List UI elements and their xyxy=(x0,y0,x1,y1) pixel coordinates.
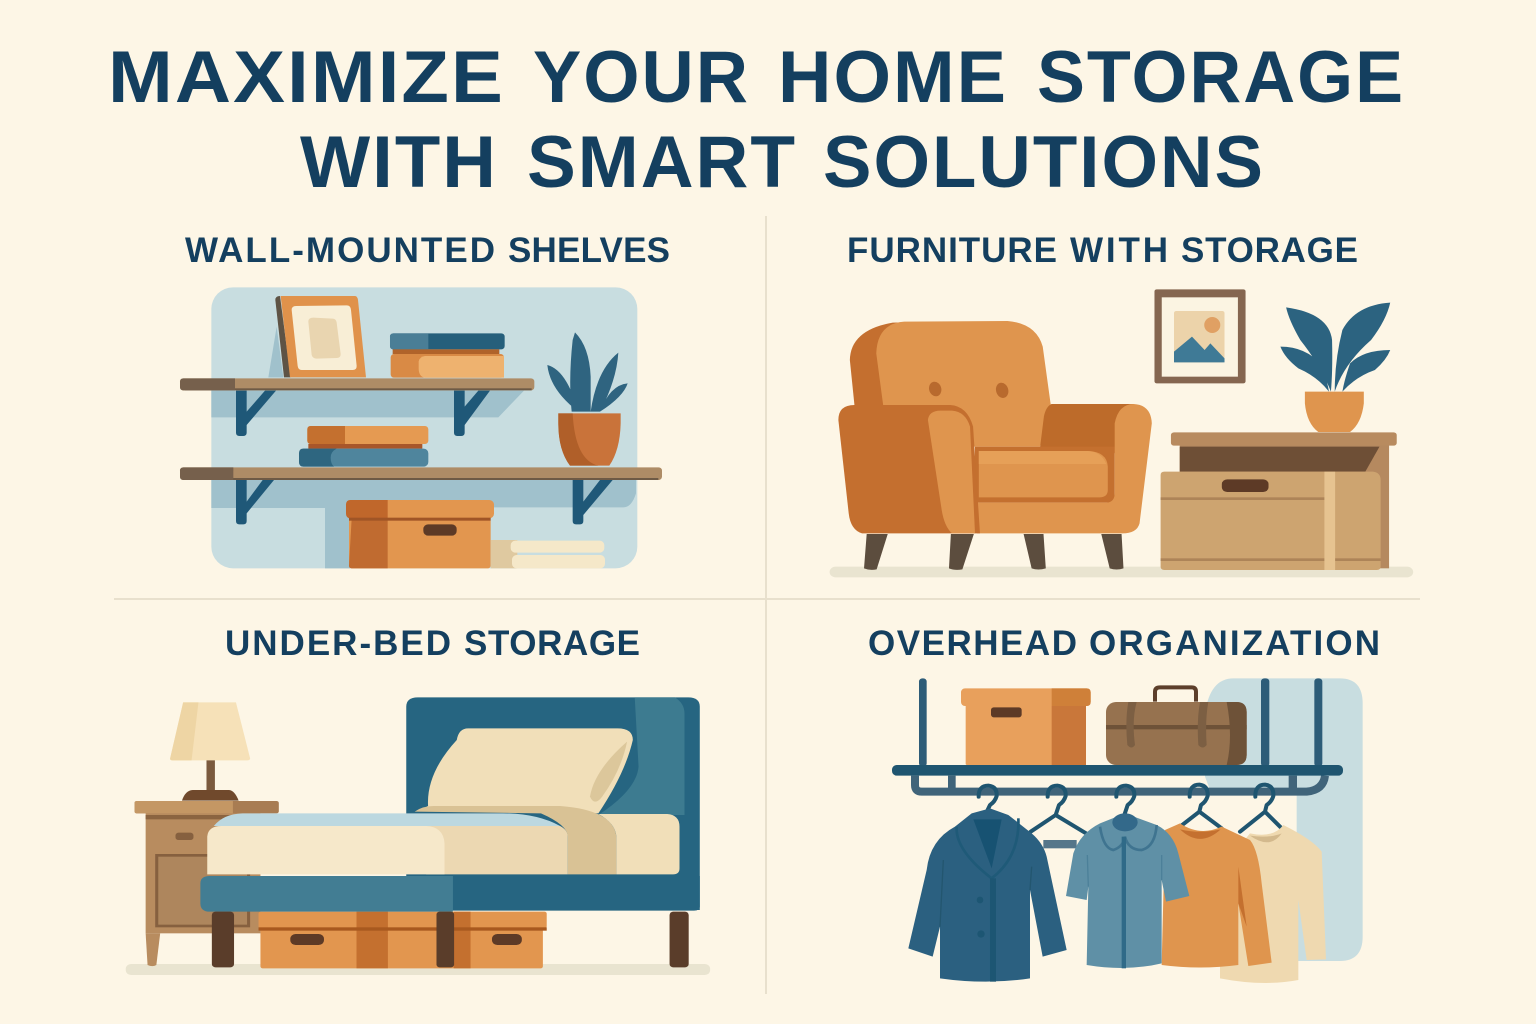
armchair xyxy=(838,321,1152,570)
overhead box xyxy=(961,688,1091,765)
heading: furniture with storage: STORAGE xyxy=(1181,231,1358,270)
title: MAXIMIZE xyxy=(108,37,505,118)
blue shirt xyxy=(1066,813,1189,968)
title: SMART xyxy=(527,122,797,203)
nightstand xyxy=(135,801,279,966)
wall picture xyxy=(1154,289,1246,383)
heading: under-bed storage: STORAGE xyxy=(464,624,640,663)
storage boxes xyxy=(259,912,547,968)
heading: wall-mounted shelves: WALL-MOUNTED xyxy=(185,231,495,270)
books upper shelf xyxy=(390,333,505,378)
suitcase xyxy=(1106,687,1247,765)
orange sweater xyxy=(1162,823,1272,967)
heading: under-bed storage: UNDER-BED xyxy=(225,624,451,663)
title xyxy=(108,37,1405,203)
upper shelf xyxy=(180,378,534,436)
illustration: wall-mounted shelves xyxy=(180,287,662,568)
hangers xyxy=(979,785,1282,833)
heading: furniture with storage: FURNITURE xyxy=(847,231,1057,270)
heading: furniture with storage xyxy=(847,231,1358,270)
rack xyxy=(892,678,1343,848)
potted plant xyxy=(547,332,628,466)
heading: wall-mounted shelves xyxy=(185,231,670,270)
plant xyxy=(1280,303,1390,432)
illustration: furniture with storage xyxy=(830,289,1413,577)
illustration: overhead organization xyxy=(892,678,1363,983)
storage table xyxy=(1161,432,1397,570)
lamp xyxy=(170,702,250,801)
title: WITH xyxy=(300,122,498,203)
heading: overhead organization: OVERHEAD xyxy=(868,624,1077,663)
bed frame xyxy=(200,876,700,967)
title: SOLUTIONS xyxy=(823,122,1265,203)
cream sweater xyxy=(1220,825,1326,983)
heading: wall-mounted shelves: SHELVES xyxy=(508,231,670,270)
mattress xyxy=(207,806,680,874)
heading: under-bed storage xyxy=(225,624,640,663)
floor xyxy=(830,567,1413,577)
storage box xyxy=(346,500,494,568)
navy coat xyxy=(908,808,1067,982)
folded linens xyxy=(491,540,605,568)
title: HOME xyxy=(778,37,1008,118)
books lower shelf xyxy=(299,426,428,467)
headboard xyxy=(406,697,700,910)
pillow xyxy=(426,728,633,813)
title: STORAGE xyxy=(1037,37,1405,118)
heading: overhead organization xyxy=(868,624,1380,663)
picture frame xyxy=(275,296,366,377)
title: YOUR xyxy=(533,37,750,118)
floor xyxy=(126,964,710,975)
heading: overhead organization: ORGANIZATION xyxy=(1089,624,1380,663)
heading: furniture with storage: WITH xyxy=(1070,231,1168,270)
lower shelf xyxy=(180,467,662,524)
illustration: under-bed storage xyxy=(126,697,710,975)
